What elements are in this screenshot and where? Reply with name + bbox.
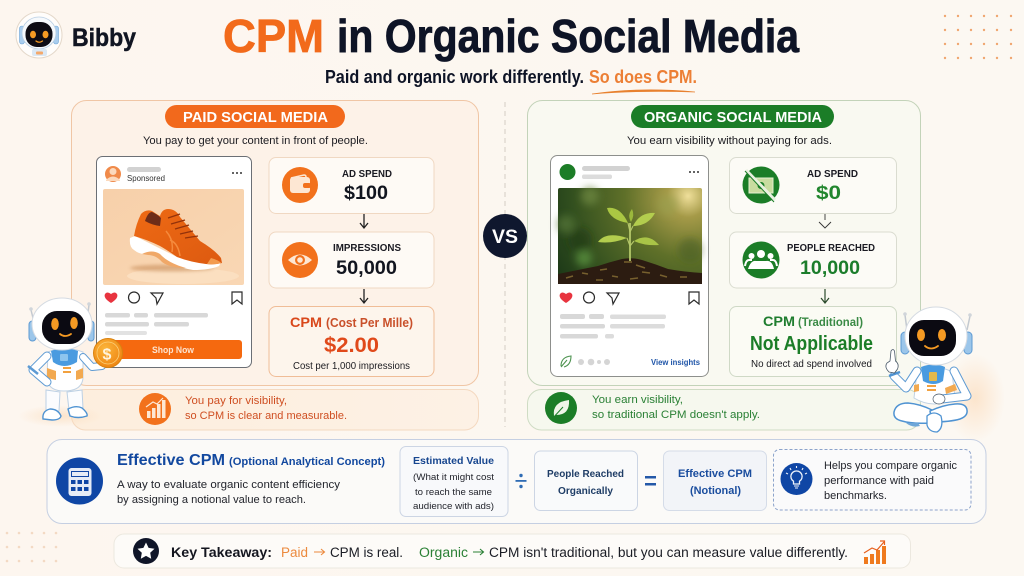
formula: estimated value: to reach the same <box>415 487 492 498</box>
organic post mockup: View insights <box>651 357 700 367</box>
legs <box>46 390 60 411</box>
panel: effective CPM <box>47 440 986 524</box>
card: traditional CPM: No direct ad spend involved <box>751 359 872 370</box>
icon: eye <box>282 242 318 278</box>
key takeaway bar <box>114 534 910 568</box>
pill heading: paid: PAID SOCIAL MEDIA <box>183 109 328 126</box>
card: people reached: 10,000 <box>800 258 860 279</box>
pill heading: paid <box>165 105 345 128</box>
icon: star <box>133 538 159 564</box>
arrow <box>360 214 368 228</box>
pill heading: organic: ORGANIC SOCIAL MEDIA <box>644 109 822 126</box>
formula: effective CPM <box>664 451 766 510</box>
pill heading: organic <box>631 105 834 128</box>
subtitle: Paid and organic work differently. <box>325 67 584 87</box>
helmet <box>31 310 34 322</box>
icon: rising bars <box>864 541 886 564</box>
formula: effective CPM: Effective CPM <box>678 468 752 480</box>
callout: organic <box>528 390 920 430</box>
card: people reached: PEOPLE REACHED <box>787 242 875 254</box>
VS badge <box>483 214 527 258</box>
card: organic ad spend: AD SPEND <box>807 168 858 180</box>
helmet <box>905 315 907 330</box>
subtitle <box>325 67 697 94</box>
effective CPM description: by assigning a notional value to reach. <box>117 494 306 506</box>
card: traditional CPM: (Traditional) <box>798 315 863 329</box>
icon: growth chart <box>139 393 171 425</box>
card: people reached <box>730 232 896 288</box>
card: traditional CPM: Not Applicable <box>750 333 873 355</box>
title: in Organic Social Media <box>337 10 799 62</box>
sponsored post mockup: Sponsored <box>127 174 165 183</box>
effective CPM description <box>117 479 341 506</box>
card: impressions <box>269 232 434 288</box>
title: CPM <box>223 10 324 62</box>
card: traditional CPM: CPM <box>763 314 795 329</box>
effective CPM heading <box>117 452 385 469</box>
brand name: Bibby <box>72 24 136 52</box>
effective CPM description: A way to evaluate organic content efficiency <box>117 479 341 491</box>
torso <box>914 367 955 404</box>
formula: estimated value: Estimated Value <box>413 455 494 467</box>
key takeaway bar: CPM isn't traditional, but you can measure value differently. <box>489 545 848 560</box>
callout: organic: so traditional CPM doesn't apply. <box>592 409 760 421</box>
card: ad spend <box>269 158 434 214</box>
paid description: You pay to get your content in front of people. <box>143 135 368 147</box>
arrow <box>821 289 829 303</box>
callout: paid: You pay for visibility, <box>185 395 287 407</box>
formula: effective CPM: (Notional) <box>690 485 741 497</box>
card: traditional CPM <box>730 306 896 376</box>
formula: estimated value: audience with ads) <box>413 501 494 512</box>
robot: right seated <box>886 307 1005 442</box>
shop now button: Shop Now <box>152 345 195 355</box>
callout: compare benchmarks <box>774 450 971 510</box>
callout: compare benchmarks: Helps you compare organic <box>824 460 957 472</box>
icon: light bulb <box>780 463 812 495</box>
key takeaway bar: Organic <box>419 545 468 560</box>
torso <box>47 348 83 391</box>
arms <box>33 356 47 382</box>
icon: dollar coin: $ <box>102 346 112 364</box>
callout: organic: You earn visibility, <box>592 394 683 406</box>
robot: left with coin <box>18 298 122 427</box>
operator: equals <box>645 476 656 486</box>
sponsored post mockup <box>96 156 252 368</box>
card: organic ad spend: $0 <box>816 183 841 204</box>
panel: paid social media <box>72 100 478 386</box>
card: CPM result: $2.00 <box>324 334 379 357</box>
effective CPM heading: (Optional Analytical Concept) <box>229 456 385 468</box>
formula: people reached: Organically <box>558 486 613 497</box>
post actions <box>560 292 699 304</box>
resting arm <box>942 371 967 399</box>
icon: calculator <box>56 458 103 504</box>
arrow <box>819 214 831 228</box>
center divider <box>504 102 506 427</box>
card: impressions: IMPRESSIONS <box>333 242 401 254</box>
icon: wallet <box>282 167 318 203</box>
organic description: You earn visibility without paying for ads. <box>627 135 832 147</box>
panel: organic social media <box>528 100 920 386</box>
card: CPM result <box>269 306 434 376</box>
card: ad spend: $100 <box>344 183 388 204</box>
arrow <box>360 289 368 303</box>
organic post mockup <box>550 156 708 376</box>
callout: paid <box>72 390 478 430</box>
card: CPM result: CPM <box>290 314 322 330</box>
VS badge: VS <box>492 227 518 248</box>
operator: divide <box>516 474 526 488</box>
logo: Bibby <box>16 12 136 58</box>
card: CPM result: Cost per 1,000 impressions <box>293 361 410 372</box>
icon: no money <box>742 166 780 204</box>
shop now button <box>112 340 242 359</box>
callout: compare benchmarks: performance with paid <box>824 475 934 487</box>
card: organic ad spend <box>730 158 896 214</box>
icon: people <box>742 242 780 278</box>
key takeaway bar: CPM is real. <box>330 545 403 560</box>
seedling image <box>557 187 702 284</box>
post actions <box>105 292 242 304</box>
card: impressions: 50,000 <box>336 258 397 279</box>
card: ad spend: AD SPEND <box>342 168 392 180</box>
formula: estimated value <box>400 446 508 516</box>
effective CPM heading: Effective CPM <box>117 452 225 469</box>
card: CPM result: (Cost Per Mille) <box>326 316 413 330</box>
formula: people reached <box>534 451 638 510</box>
crossed legs <box>894 403 932 423</box>
key takeaway bar: Key Takeaway: <box>171 544 272 560</box>
subtitle: So does CPM. <box>589 67 697 87</box>
decorative dots <box>944 15 1012 59</box>
shoe image <box>103 189 244 285</box>
formula: estimated value: (What it might cost <box>413 472 494 483</box>
raised arm <box>894 371 917 388</box>
callout: compare benchmarks: benchmarks. <box>824 490 887 502</box>
callout: paid: so CPM is clear and measurable. <box>185 410 347 422</box>
key takeaway bar: Paid <box>281 545 308 560</box>
formula: people reached: People Reached <box>547 469 624 480</box>
icon: leaf <box>545 392 577 424</box>
